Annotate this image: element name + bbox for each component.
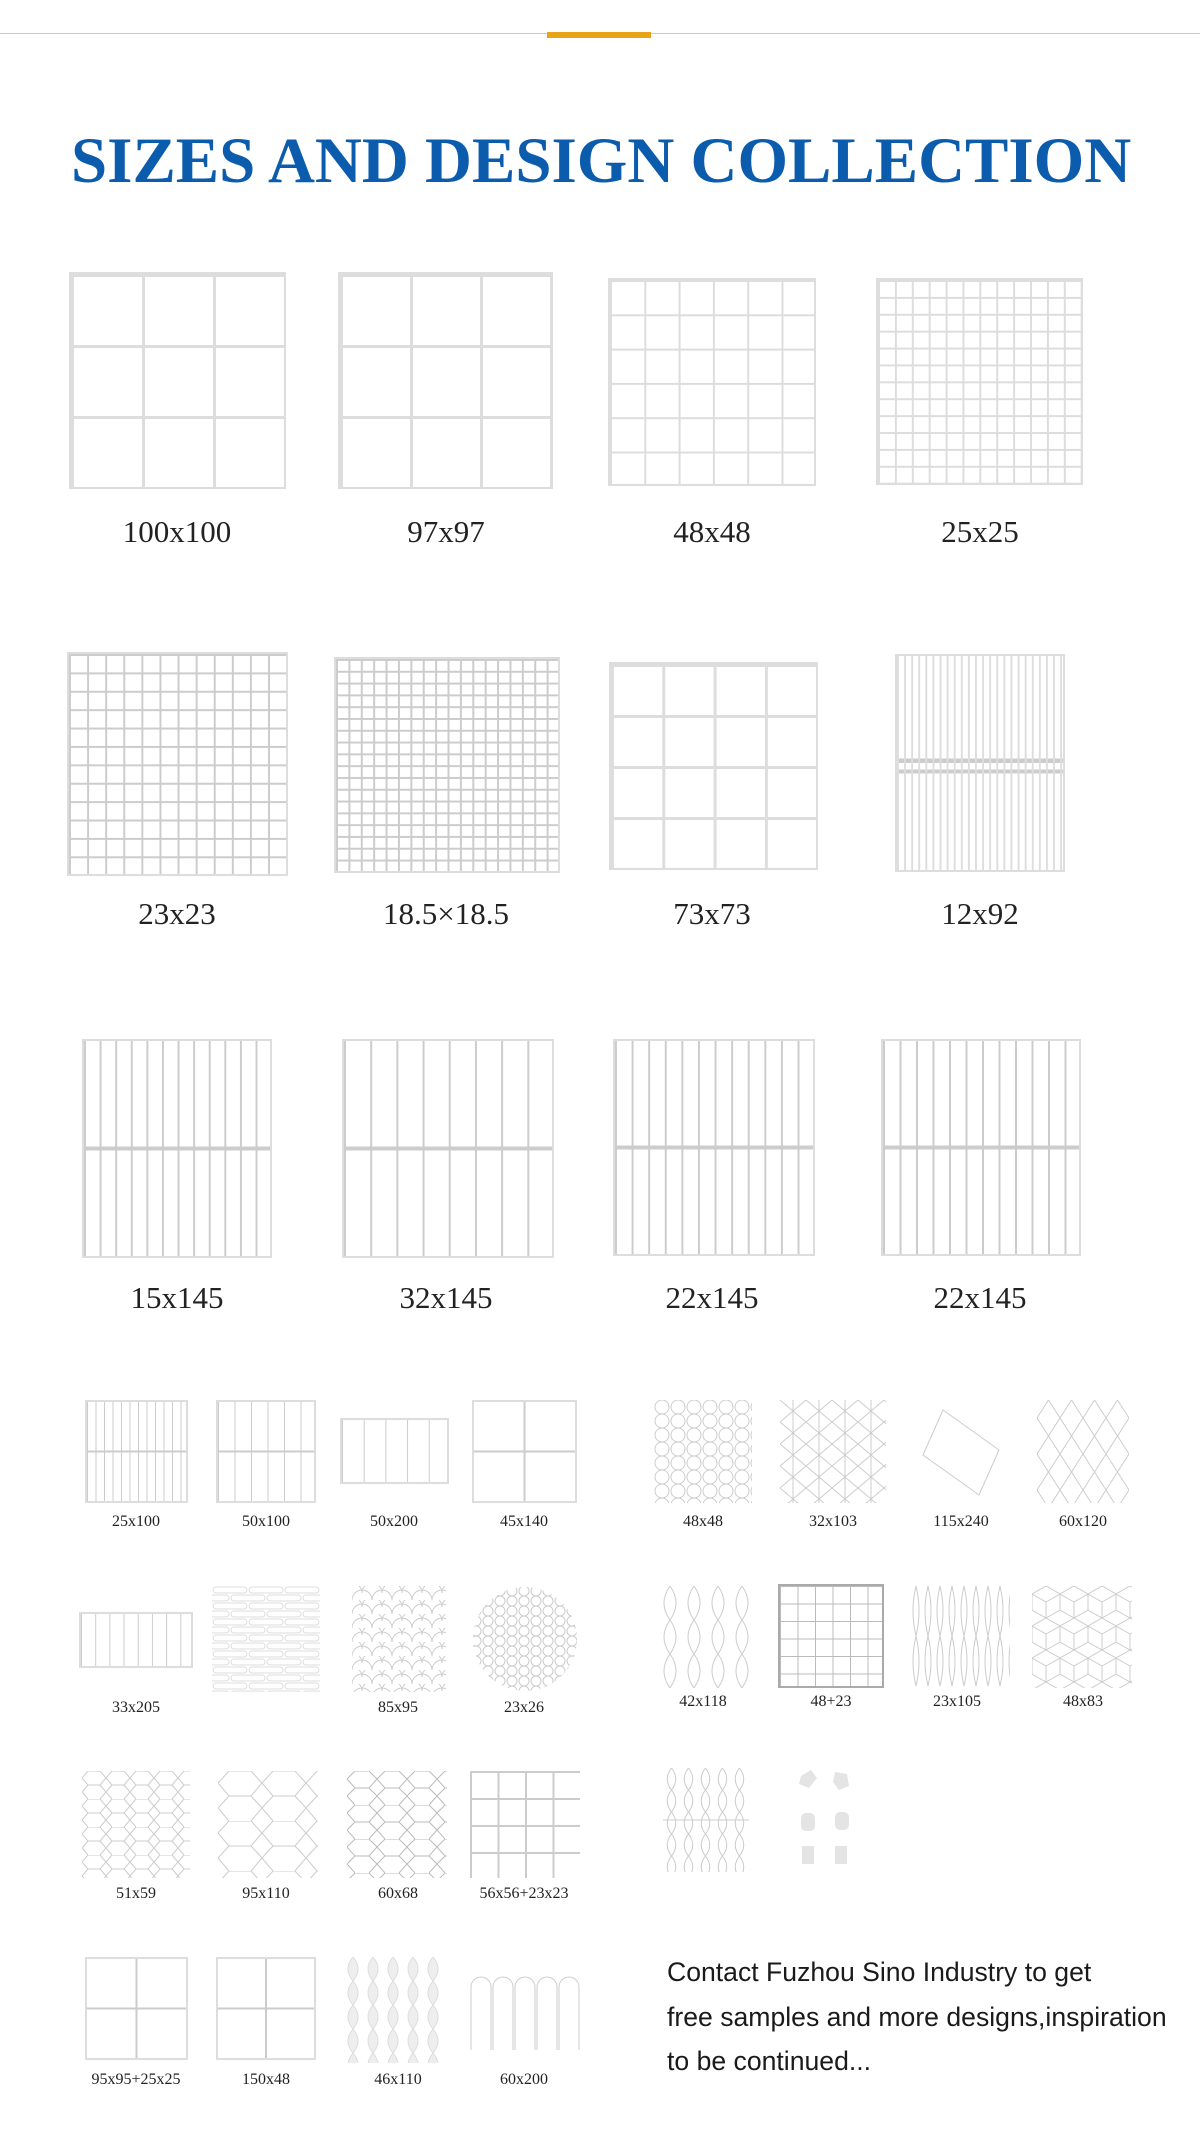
label 23x105: 23x105	[933, 1693, 981, 1710]
label 22x145 A: 22x145	[666, 1280, 758, 1315]
label 115x240: 115x240	[933, 1513, 989, 1530]
small tile 48x83	[1032, 1586, 1132, 1688]
small tile 56x56+23x23	[470, 1771, 580, 1878]
label 18.5x18.5: 18.5×18.5	[383, 896, 509, 931]
label 32x103: 32x103	[809, 1513, 857, 1530]
contact text block	[667, 1957, 1167, 2076]
tile 97x97	[338, 272, 553, 489]
small tile 60x120	[1037, 1400, 1129, 1503]
tile 25x25	[876, 278, 1083, 485]
tile 100x100	[69, 272, 286, 489]
small tile 25x100	[85, 1400, 188, 1503]
label 15x145: 15x145	[130, 1280, 224, 1315]
label 48x83: 48x83	[1063, 1693, 1103, 1710]
label 85x95: 85x95	[378, 1699, 418, 1716]
tile 12x92	[895, 654, 1065, 872]
label 97x97: 97x97	[407, 514, 485, 549]
orange accent bar	[547, 32, 651, 38]
label 73x73: 73x73	[673, 896, 751, 931]
contact text block: Contact Fuzhou Sino Industry to get	[667, 1957, 1091, 1987]
small tile 46x110	[348, 1957, 438, 2063]
small tile 51x59	[82, 1771, 190, 1878]
small tile 150x48	[216, 1957, 316, 2060]
small tile 45x140	[472, 1400, 577, 1503]
tile 32x145	[342, 1039, 554, 1258]
tile 48x48	[608, 278, 816, 486]
label 33x205: 33x205	[112, 1699, 160, 1716]
label 22x145 B: 22x145	[934, 1280, 1026, 1315]
label 60x68: 60x68	[378, 1885, 418, 1902]
small tile 48+23	[778, 1584, 884, 1688]
label 46x110: 46x110	[374, 2071, 422, 2088]
small tile 23x26 hex	[473, 1587, 577, 1691]
small tile lantern	[663, 1768, 749, 1872]
small tile 85x95 scales	[352, 1586, 446, 1692]
label 48x48: 48x48	[673, 514, 751, 549]
label 60x200: 60x200	[500, 2071, 548, 2088]
trim pieces icons	[799, 1770, 849, 1864]
label 12x92: 12x92	[941, 896, 1019, 931]
label 45x140: 45x140	[500, 1513, 548, 1530]
small tile 32x103 chevron	[780, 1400, 886, 1503]
tile 22x145 B	[881, 1039, 1081, 1256]
label 23x26: 23x26	[504, 1699, 544, 1716]
tile 18.5x18.5	[334, 657, 560, 873]
label 56x56+23x23: 56x56+23x23	[479, 1885, 569, 1902]
label 50x100: 50x100	[242, 1513, 290, 1530]
label 23x23: 23x23	[138, 896, 216, 931]
label 51x59: 51x59	[116, 1885, 156, 1902]
label 50x200: 50x200	[370, 1513, 418, 1530]
tile 22x145 A	[613, 1039, 815, 1256]
label 48+23: 48+23	[810, 1693, 852, 1710]
small tile 115x240	[922, 1409, 1000, 1496]
small tile 50x200	[340, 1418, 449, 1484]
small tile 42x118 leaf	[664, 1586, 748, 1688]
label 42x118: 42x118	[679, 1693, 727, 1710]
label 95x110: 95x110	[242, 1885, 290, 1902]
small tile 95x95+25x25	[85, 1957, 188, 2060]
label 48x48: 48x48	[683, 1513, 723, 1530]
label 60x120: 60x120	[1059, 1513, 1107, 1530]
label 32x145: 32x145	[400, 1280, 492, 1315]
label 25x100: 25x100	[112, 1513, 160, 1530]
tile 23x23	[67, 652, 288, 876]
small tile 48x48 circles	[654, 1400, 752, 1503]
small tile 60x200	[470, 1976, 580, 2050]
small tile brick	[212, 1586, 320, 1692]
label 150x48: 150x48	[242, 2071, 290, 2088]
label 25x25: 25x25	[941, 514, 1019, 549]
tile 73x73	[609, 662, 818, 870]
tile 15x145	[82, 1039, 272, 1258]
small tile 33x205	[79, 1612, 193, 1668]
small tile 60x68	[347, 1771, 447, 1878]
small tile 95x110	[218, 1771, 318, 1878]
contact text block: to be continued...	[667, 2046, 871, 2076]
top divider line	[0, 33, 1200, 34]
title: SIZES AND DESIGN COLLECTION	[71, 125, 1131, 197]
small tile 50x100	[216, 1400, 316, 1503]
label 100x100: 100x100	[123, 514, 231, 549]
small tile 23x105	[912, 1586, 1010, 1686]
label 95x95+25x25: 95x95+25x25	[91, 2071, 181, 2088]
contact text block: free samples and more designs,inspiration	[667, 2002, 1167, 2032]
